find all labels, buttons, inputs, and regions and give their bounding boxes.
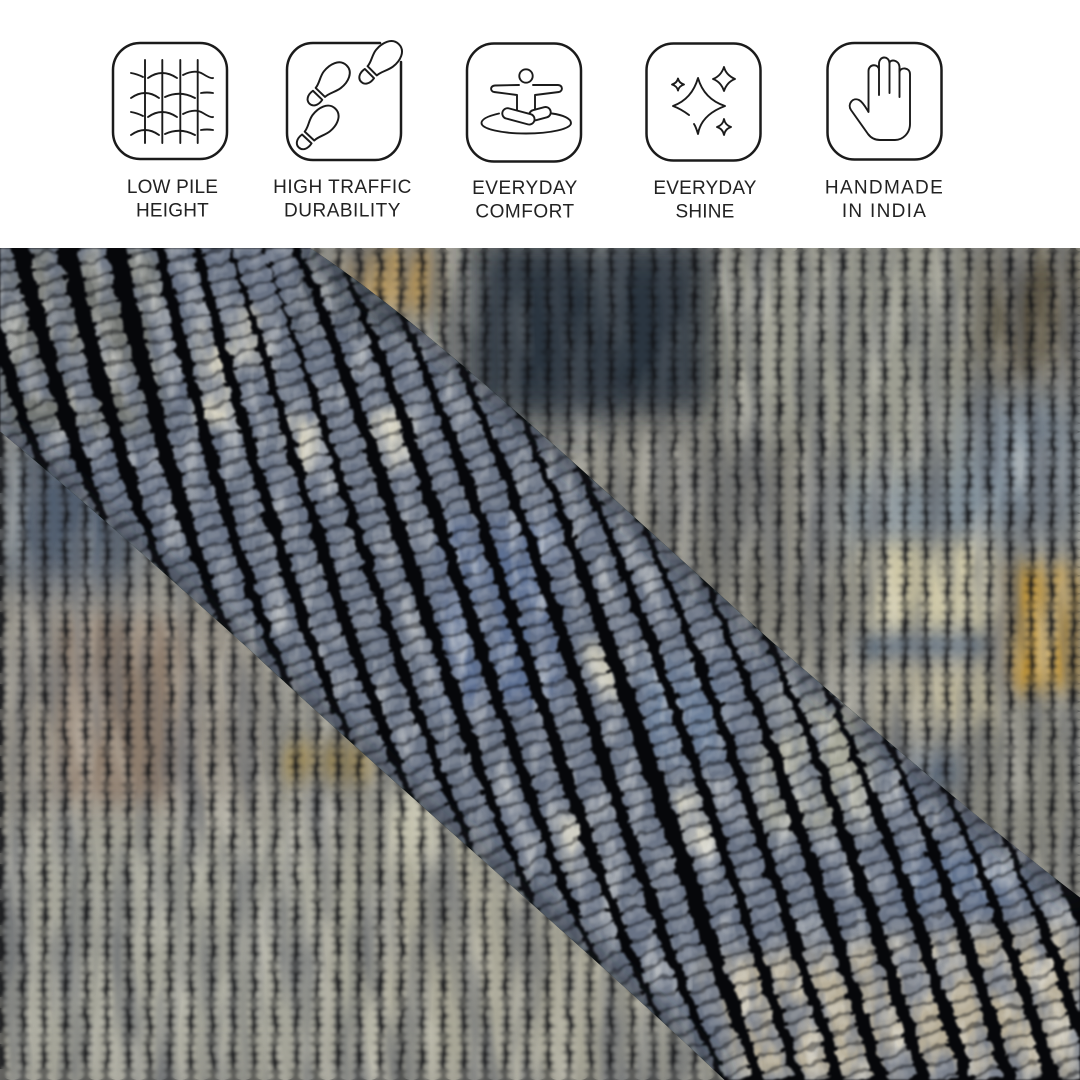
label: high traffic durability: HIGH TRAFFIC xyxy=(273,177,412,198)
feature: everyday comfort xyxy=(467,44,581,222)
icon: open hand xyxy=(828,43,942,160)
label: high traffic durability: DURABILITY xyxy=(284,200,401,222)
label: everyday shine: SHINE xyxy=(675,202,735,222)
yarn highlights xyxy=(0,248,1080,1080)
feature: handmade in india xyxy=(825,43,944,222)
icon: pile threads xyxy=(113,43,227,159)
white header band xyxy=(0,0,1080,248)
label: handmade in india: HANDMADE xyxy=(825,178,944,198)
label: everyday comfort: EVERYDAY xyxy=(472,178,578,199)
label: low pile height: LOW PILE xyxy=(127,177,218,198)
icon: footprints xyxy=(287,36,407,160)
label: handmade in india: IN INDIA xyxy=(842,201,927,222)
feature: everyday shine xyxy=(646,44,760,222)
feature: low pile height xyxy=(113,43,227,222)
yarn colour layer xyxy=(0,248,1080,1080)
rug background, out of focus xyxy=(0,248,1080,1080)
feature: high traffic durability xyxy=(273,36,412,221)
label: everyday comfort: COMFORT xyxy=(475,202,575,222)
icon: sparkles xyxy=(646,44,760,160)
roll edge shading xyxy=(0,248,1080,1080)
label: low pile height: HEIGHT xyxy=(136,200,209,222)
icon: seated meditation figure xyxy=(467,44,581,162)
label: everyday shine: EVERYDAY xyxy=(653,178,757,199)
rolled rug edge xyxy=(0,248,1080,1080)
photo: rolled rug close-up xyxy=(0,248,1080,1080)
